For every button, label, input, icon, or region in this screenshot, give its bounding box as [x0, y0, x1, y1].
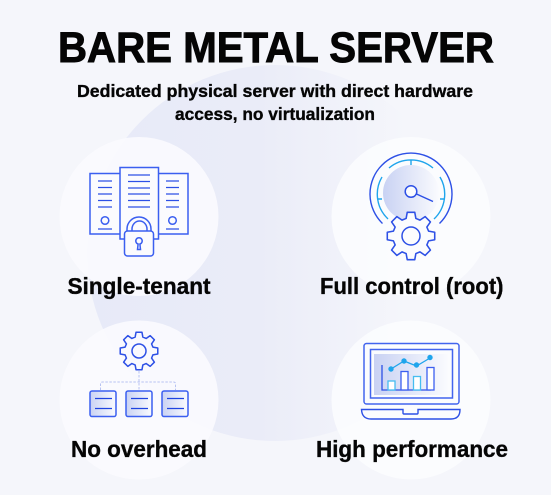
label: No overhead: [71, 436, 207, 462]
subtitle: Dedicated physical server with direct hardware: [77, 81, 473, 101]
subtitle: [77, 81, 473, 124]
panel: single-tenant: [60, 137, 218, 299]
icon: gear with three nodes: [90, 332, 188, 416]
icon: laptop with chart: [362, 344, 460, 419]
label: Full control (root): [320, 273, 504, 299]
title: BARE METAL SERVER: [58, 25, 494, 72]
label: High performance: [316, 436, 508, 462]
subtitle: access, no virtualization: [175, 104, 375, 124]
panel: no overhead: [60, 320, 218, 480]
icon: servers with padlock: [90, 168, 188, 256]
background circle: [87, 65, 463, 441]
panel: high performance: [316, 320, 508, 480]
panel: full control: [320, 137, 504, 299]
icon: gauge with gear: [370, 153, 452, 260]
label: Single-tenant: [68, 273, 211, 299]
